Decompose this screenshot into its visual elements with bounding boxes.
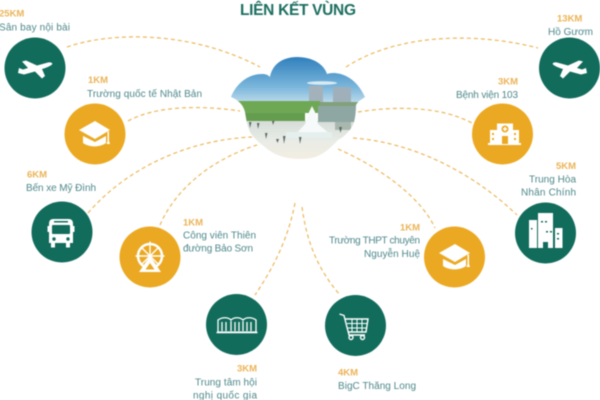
place name: hospital 103: Bệnh viện 103	[456, 90, 518, 101]
item: hospital 103	[456, 76, 533, 164]
distance label: 3KM: 3KM	[498, 76, 518, 88]
icon circle: Nguyen Hue high school	[424, 226, 485, 288]
distance label: 4KM: 4KM	[338, 368, 358, 378]
place name: Japanese school: Trường quốc tế Nhật Bản	[87, 88, 202, 100]
place name: airport: Sân bay nội bài	[0, 22, 70, 34]
distance label: 13KM: 13KM	[557, 14, 582, 24]
icon circle: Trung Hoa Nhan Chinh	[515, 202, 576, 264]
place name: convention centre: Trung tâm hội	[195, 378, 257, 388]
item: Hoan Kiem lake	[539, 14, 600, 98]
item: Trung Hoa Nhan Chinh	[515, 161, 576, 264]
item: Nguyen Hue high school	[329, 222, 485, 288]
icon circle: Japanese school	[64, 104, 126, 164]
icon circle: airport	[4, 38, 66, 98]
place name: Trung Hoa Nhan Chinh: Trung Hòa	[529, 174, 576, 186]
icon circle: Hoan Kiem lake	[539, 38, 600, 98]
icon: graduation cap	[439, 244, 470, 269]
item: Trung Hoa Nhan Chinh: Nhân Chính	[521, 188, 576, 198]
distance label: 1KM: 1KM	[88, 75, 108, 86]
icon: hospital	[488, 124, 521, 145]
icon circle: hospital 103	[472, 104, 533, 164]
item: Bao Son park	[120, 218, 256, 288]
item: Nguyen Hue high school: Nguyễn Huệ	[364, 247, 420, 260]
item: Japanese school	[64, 75, 202, 164]
distance label: 1KM: 1KM	[183, 218, 203, 228]
place name: Hoan Kiem lake: Hồ Gươm	[548, 26, 593, 38]
icon: ferris wheel	[136, 242, 164, 272]
item: Bao Son park: đường Bảo Sơn	[183, 244, 253, 254]
icon circle: BigC supermarket	[325, 295, 386, 356]
icon circle: bus station	[32, 202, 92, 262]
item: convention centre	[193, 294, 267, 400]
item: bus station	[26, 170, 96, 262]
title: LIÊN KẾT VÙNG	[240, 1, 356, 19]
item: airport	[0, 8, 70, 98]
distance label: 3KM: 3KM	[237, 364, 257, 374]
icon: graduation cap	[79, 121, 110, 146]
place name: Nguyen Hue high school: Trường THPT chuyên	[329, 236, 420, 246]
item: BigC supermarket	[325, 295, 416, 392]
distance label: 1KM: 1KM	[400, 222, 420, 234]
distance label: 5KM: 5KM	[556, 161, 576, 172]
dashed connectors	[67, 37, 538, 295]
icon: plane	[553, 60, 587, 78]
place name: BigC supermarket: BigC Thăng Long	[338, 381, 416, 392]
icon: shopping cart	[340, 314, 368, 340]
place name: bus station: Bến xe Mỹ Đình	[26, 182, 96, 194]
icon: convention hall	[216, 318, 258, 332]
distance label: 6KM: 6KM	[27, 170, 47, 180]
icon: buildings	[529, 213, 562, 248]
place name: Bao Son park: Công viên Thiên	[183, 230, 256, 242]
icon circle: Bao Son park	[120, 226, 180, 288]
icon: plane	[18, 60, 52, 78]
central cloud photo	[228, 55, 368, 161]
icon: bus	[48, 219, 74, 248]
icon circle: convention centre	[206, 294, 267, 355]
